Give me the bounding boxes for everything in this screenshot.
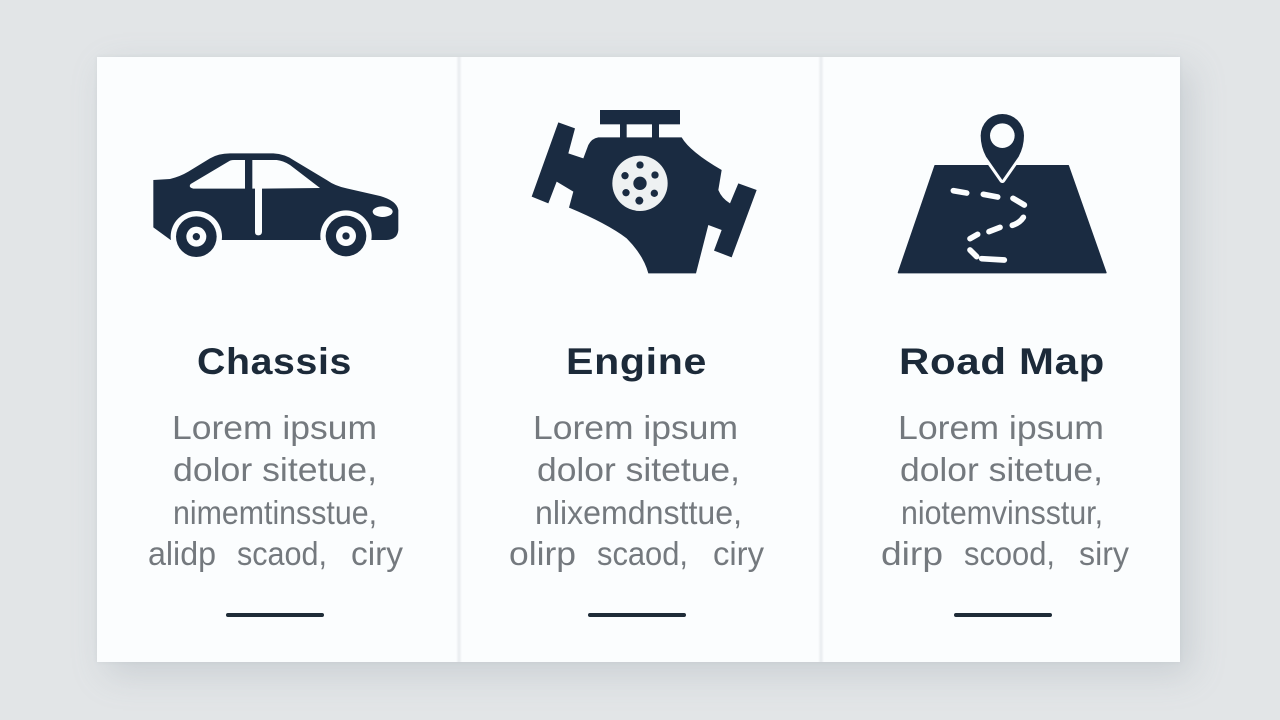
card background: [97, 57, 1180, 662]
text block: chassis description: alidp: [148, 535, 216, 572]
accent rule: [588, 613, 686, 617]
text block: engine description: scaod,: [597, 535, 688, 572]
text block: road map description: dirp: [881, 535, 943, 572]
text block: chassis description: dolor sitetue,: [173, 451, 377, 488]
text block: engine description: olirp: [509, 535, 576, 572]
text block: road map description: siry: [1079, 535, 1129, 572]
text block: chassis description: ciry: [351, 535, 403, 572]
icon: map with location pin: [898, 114, 1106, 273]
text block: chassis description: Lorem ipsum: [172, 409, 377, 446]
text block: road map description: dolor sitetue,: [900, 451, 1103, 488]
text block: road map description: Lorem ipsum: [898, 409, 1104, 446]
text block: road map description: niotemvinsstur,: [901, 494, 1103, 531]
divider between chassis and engine: [456, 57, 462, 662]
divider between engine and road map: [818, 57, 824, 662]
icon: engine: [532, 110, 757, 273]
heading: Road Map: Road Map: [899, 341, 1105, 382]
text block: engine description: [509, 409, 764, 572]
text block: road map description: [881, 409, 1129, 572]
heading: Engine: Engine: [566, 341, 707, 382]
panel: chassis: [148, 153, 403, 617]
text block: engine description: dolor sitetue,: [537, 451, 740, 488]
icon: car: [153, 153, 398, 262]
panel: road map: [881, 114, 1129, 617]
accent rule: [226, 613, 324, 617]
text block: chassis description: nimemtinsstue,: [173, 494, 377, 531]
text block: engine description: Lorem ipsum: [533, 409, 738, 446]
text block: chassis description: scaod,: [237, 535, 327, 572]
accent rule: [954, 613, 1052, 617]
text block: road map description: scood,: [964, 535, 1055, 572]
text block: chassis description: [148, 409, 403, 572]
text block: engine description: ciry: [713, 535, 764, 572]
heading: Chassis: Chassis: [197, 341, 352, 382]
text block: engine description: nlixemdnsttue,: [535, 494, 742, 531]
panel: engine: [509, 110, 764, 617]
